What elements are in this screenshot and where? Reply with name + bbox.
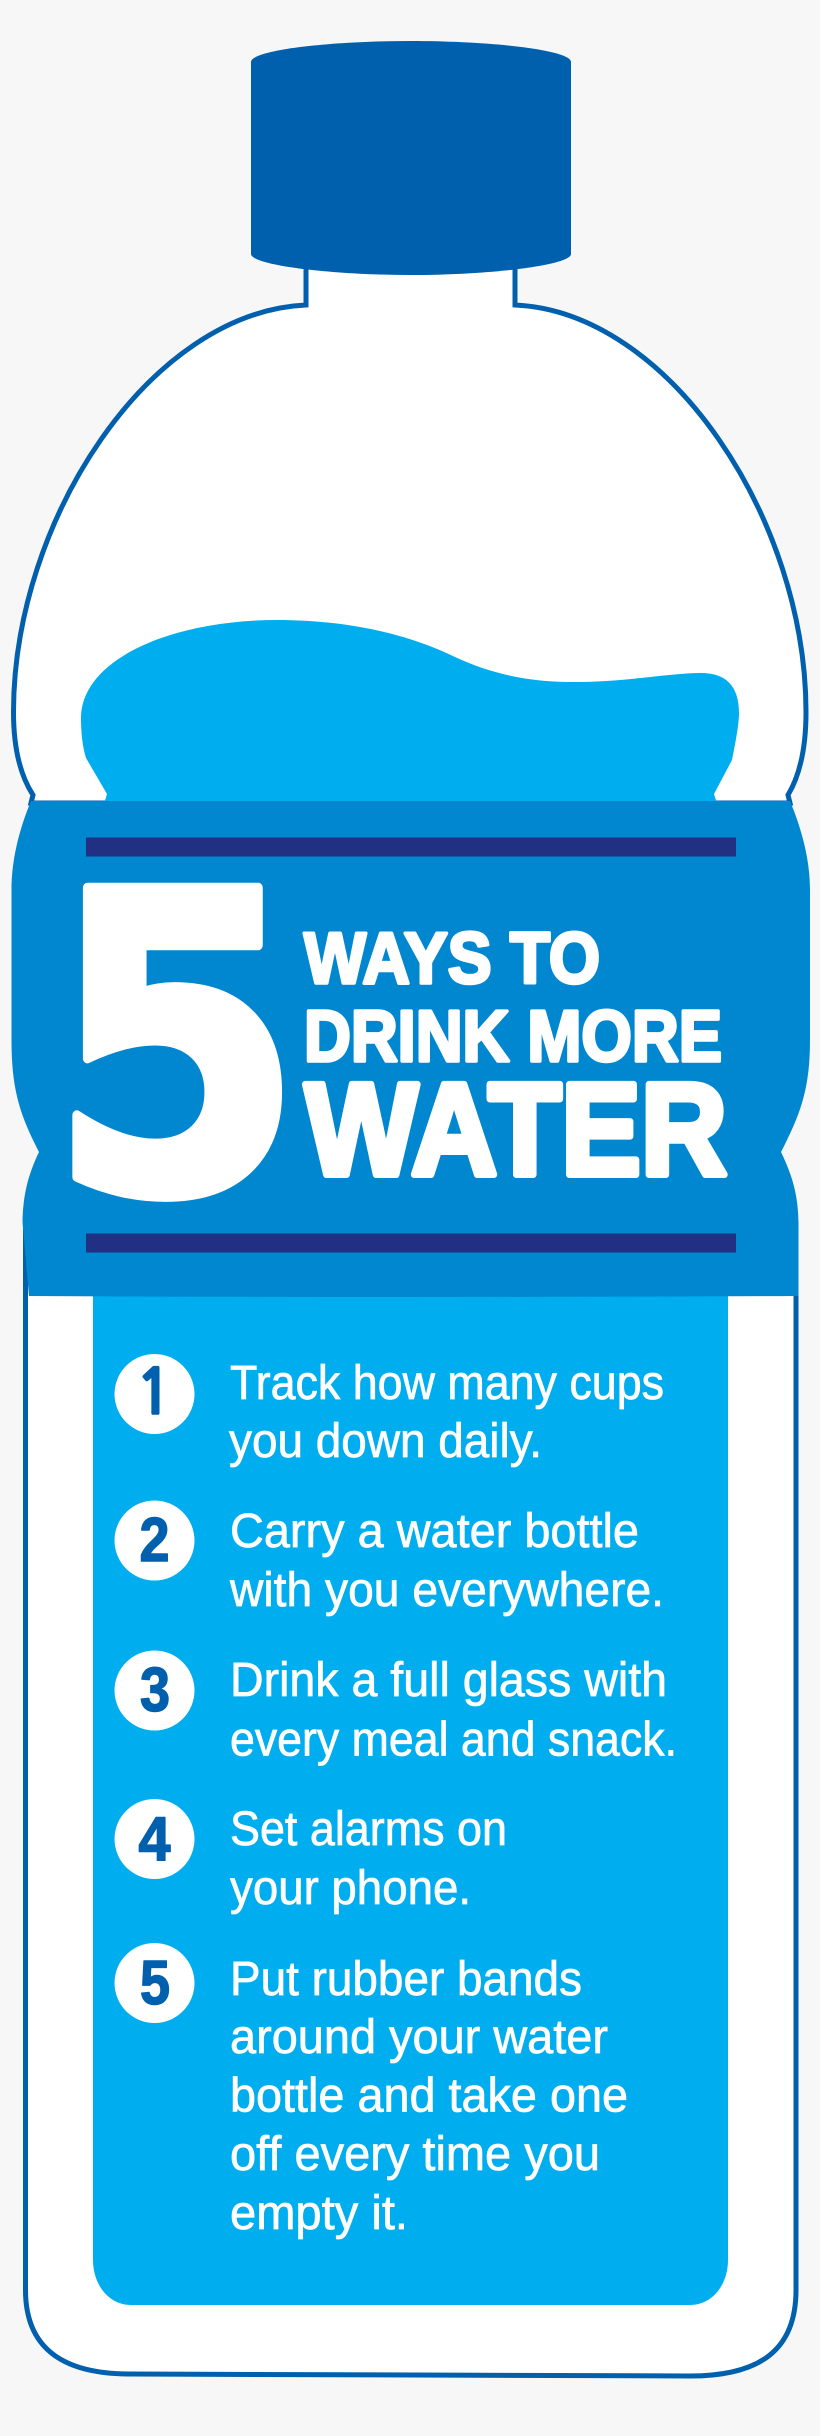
bottle cap xyxy=(251,41,571,275)
digit 3: 3 xyxy=(140,1656,170,1725)
digit 4: 4 xyxy=(138,1805,171,1874)
tip 4 text: Set alarms on xyxy=(230,1803,507,1856)
tip 1 text: you down daily. xyxy=(229,1415,542,1468)
panel: tips background xyxy=(93,1290,728,2305)
digit 2: 2 xyxy=(140,1506,170,1575)
tip 5 text: empty it. xyxy=(230,2187,408,2240)
tip 2 xyxy=(114,1500,664,1617)
panel: title label band xyxy=(12,801,810,1297)
digit 1: 1 xyxy=(135,1363,173,1424)
tip 3 text: every meal and snack. xyxy=(230,1714,677,1766)
number badge 4 xyxy=(114,1799,194,1879)
title line 3: WATER xyxy=(305,1056,727,1202)
tip 3 text: Drink a full glass with xyxy=(230,1654,667,1707)
bottom navy rule xyxy=(86,1234,736,1252)
title line 2: DRINK MORE xyxy=(304,997,722,1077)
title line 1: WAYS TO xyxy=(304,919,600,999)
big numeral 5: 5 xyxy=(48,806,303,1290)
number badge 2 xyxy=(114,1500,194,1580)
bottle lower body xyxy=(26,1222,796,2376)
tip 3 xyxy=(114,1650,677,1766)
digit 5: 5 xyxy=(140,1949,170,2018)
tip 5 xyxy=(114,1943,628,2240)
tip 2 text: Carry a water bottle xyxy=(230,1505,639,1558)
tip 1 xyxy=(114,1354,664,1468)
tip 1 text: Track how many cups xyxy=(230,1357,664,1410)
tip 5 text: off every time you xyxy=(230,2128,600,2181)
top navy rule xyxy=(86,838,736,856)
bottle upper body xyxy=(14,262,806,803)
number badge 1 xyxy=(114,1354,194,1434)
tip 4 text: your phone. xyxy=(230,1862,471,1915)
tip 5 text: around your water xyxy=(230,2011,608,2064)
tip 5 text: Put rubber bands xyxy=(230,1953,582,2006)
tip 5 text: bottle and take one xyxy=(230,2070,628,2122)
title xyxy=(48,806,727,1290)
number badge 3 xyxy=(114,1650,194,1730)
number badge 5 xyxy=(114,1943,194,2023)
water in bottle xyxy=(81,620,739,802)
tip 2 text: with you everywhere. xyxy=(229,1564,664,1617)
tip 4 xyxy=(114,1799,507,1915)
